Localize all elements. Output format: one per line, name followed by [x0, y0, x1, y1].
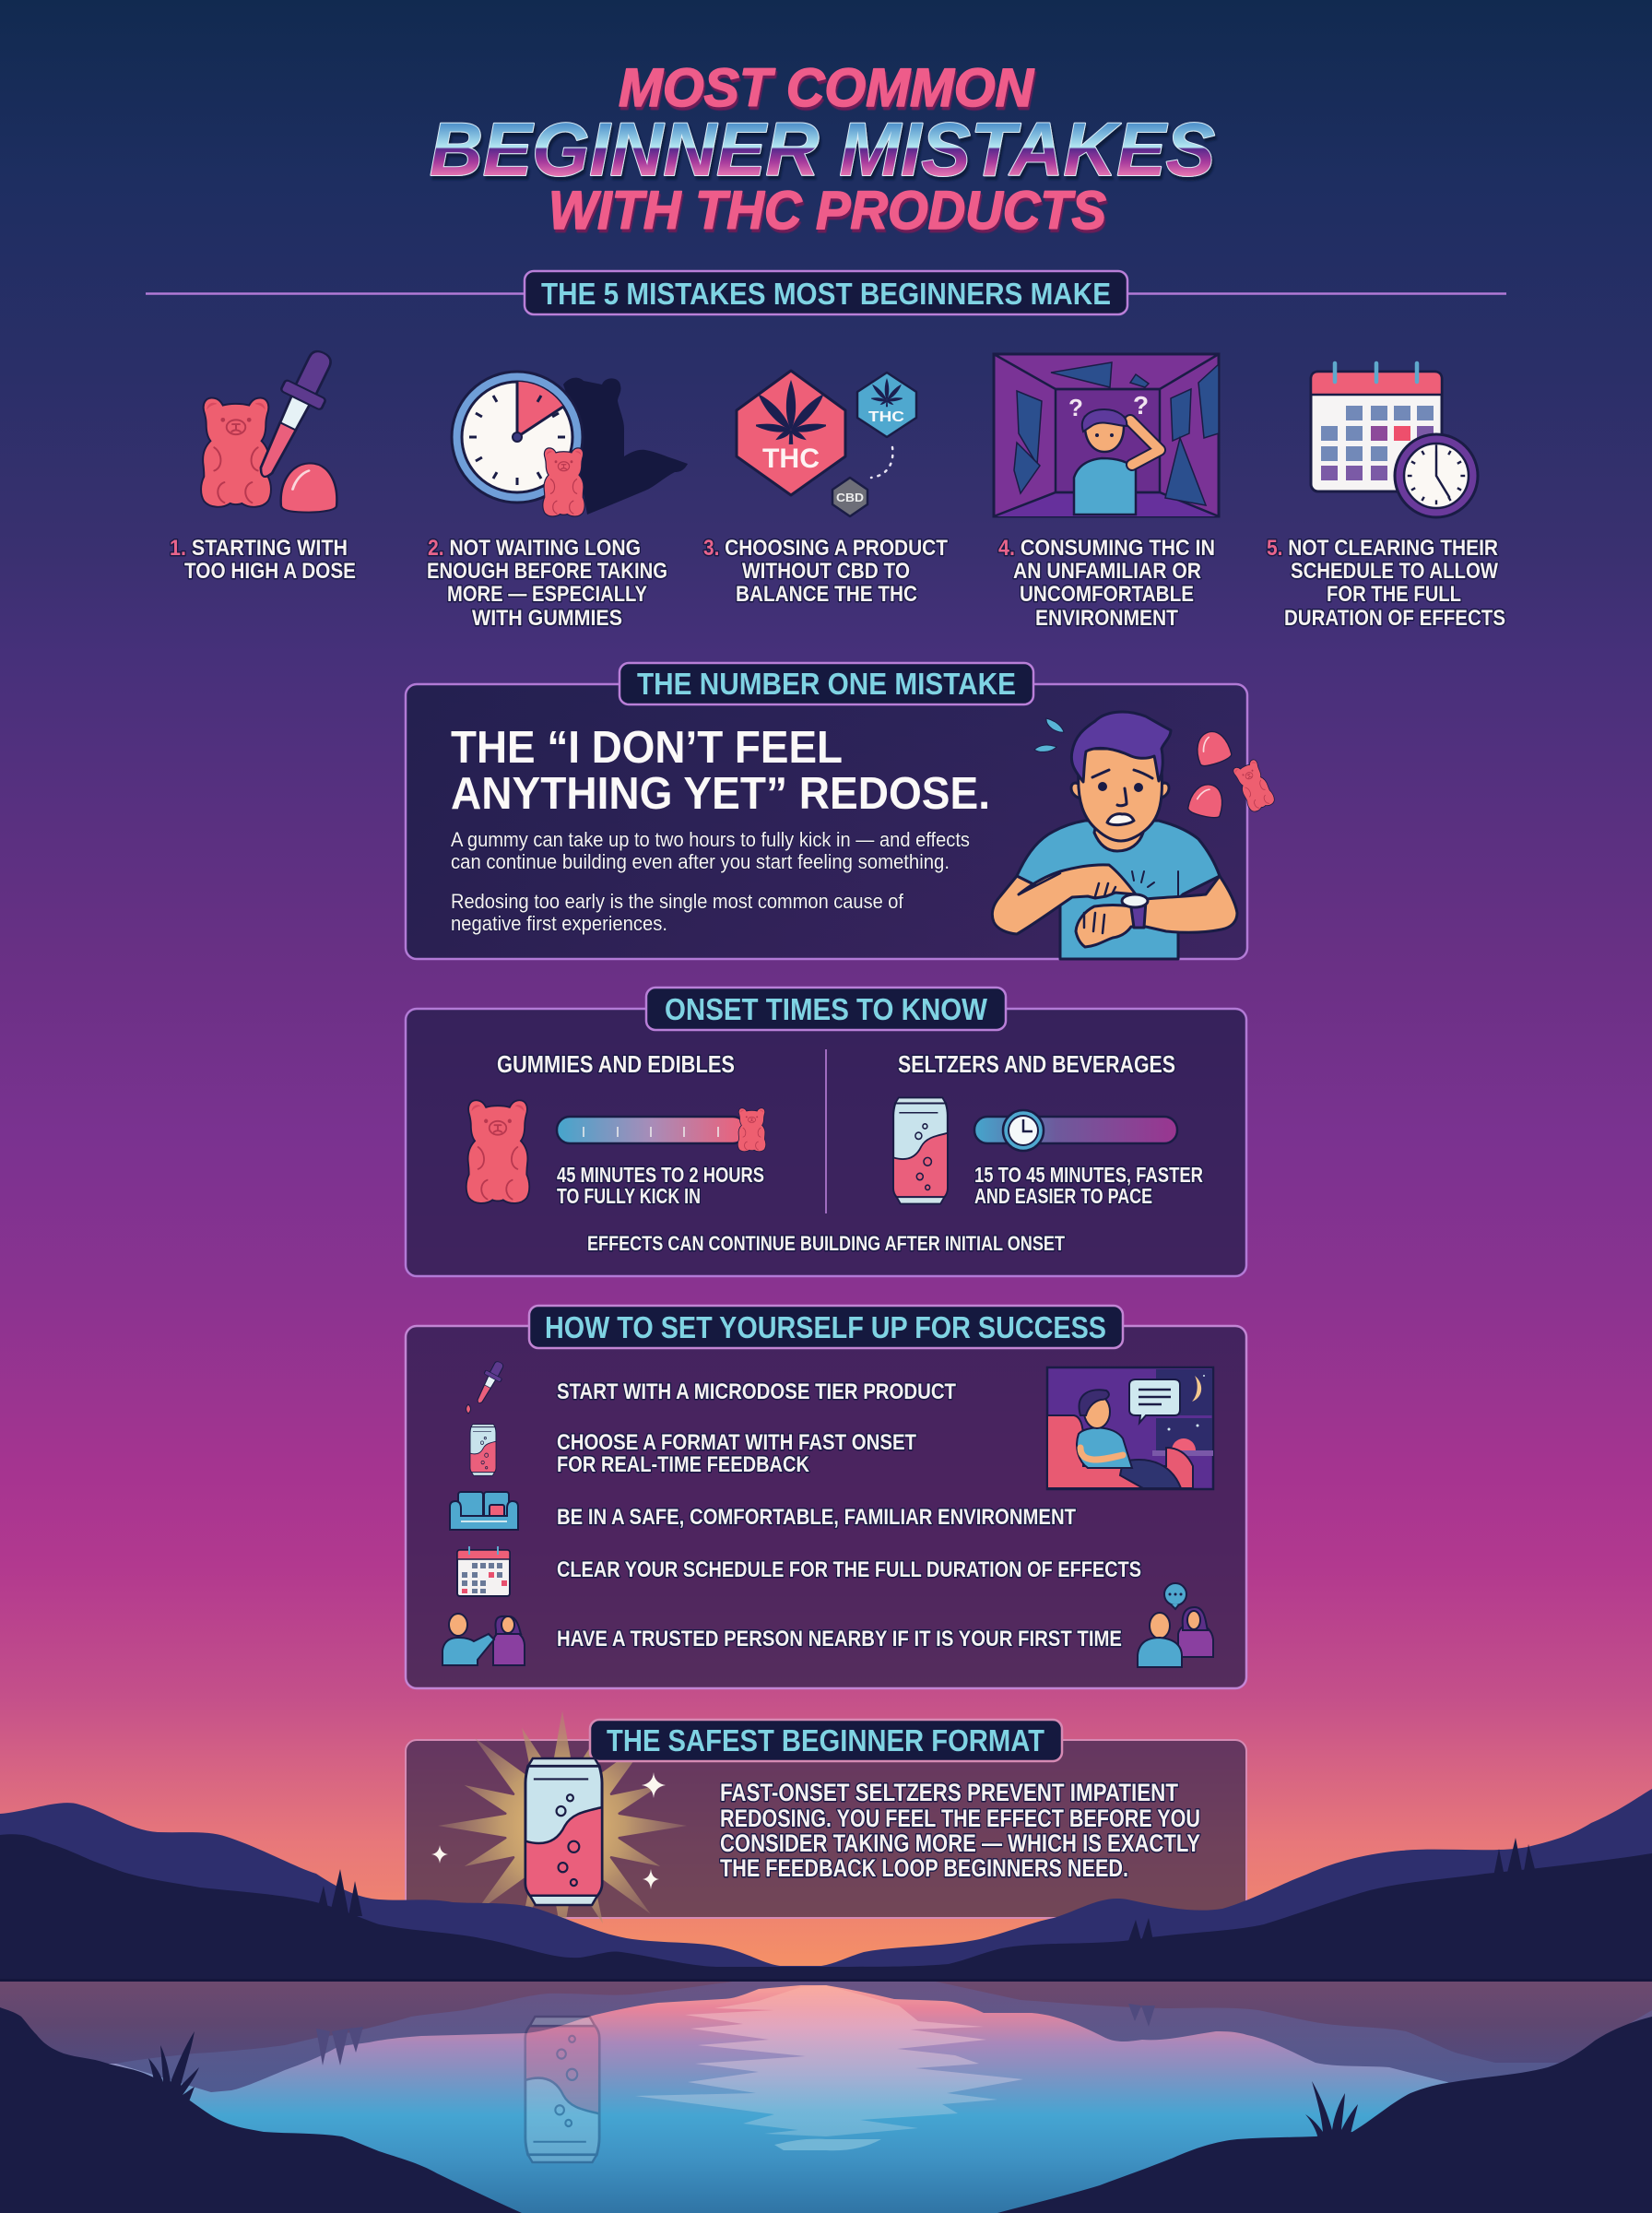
icon: two people — [442, 1614, 525, 1665]
onset bar with clock — [974, 1110, 1177, 1151]
tip: microdose: START WITH A MICRODOSE TIER PRODUCT — [557, 1379, 956, 1404]
icon: distorted room with confused person — [994, 354, 1219, 516]
mistake 2 label — [427, 536, 667, 631]
front mountain range — [0, 1834, 1652, 1981]
person: ? — [1068, 394, 1083, 421]
body text: CONSIDER TAKING MORE — WHICH IS EXACTLY — [720, 1829, 1200, 1857]
large THC hexagon — [737, 371, 845, 495]
body text: negative first experiences. — [451, 912, 667, 935]
mistake 5 label: FOR THE FULL — [1327, 582, 1461, 607]
icons: floating gummies — [1186, 728, 1277, 820]
watch — [1130, 901, 1146, 928]
icon: two people talking — [1138, 1583, 1213, 1667]
panel: the number one mistake — [406, 663, 1277, 959]
mistake 2 label: MORE — ESPECIALLY — [447, 582, 647, 607]
mistake 4 label: UNCOMFORTABLE — [1020, 582, 1194, 607]
mistake 3 label: BALANCE THE THC — [736, 582, 917, 607]
icon: THC and CBD hexagons — [737, 371, 916, 516]
CBD hexagon: CBD — [836, 491, 864, 504]
tip: fast onset: FOR REAL-TIME FEEDBACK — [557, 1452, 810, 1477]
mistake 3 label — [703, 536, 948, 607]
headline: THE “I DON’T FEEL — [451, 723, 843, 773]
panel: how to set yourself up for success — [406, 1306, 1246, 1688]
head — [1071, 783, 1169, 799]
illustration: worried person checking watch — [992, 712, 1237, 959]
near shores — [0, 2007, 1652, 2213]
landscape: mountains — [0, 1789, 1652, 1981]
grass tuft left — [148, 2031, 199, 2104]
grass tuft right — [1305, 2081, 1358, 2139]
illustration: person relaxing on a sofa at night — [1047, 1367, 1213, 1489]
icon: dropper — [466, 1358, 508, 1414]
body text: FAST-ONSET SELTZERS PREVENT IMPATIENT — [720, 1779, 1178, 1806]
title line: beginner mistakes: BEGINNER MISTAKES — [430, 108, 1215, 192]
tip: fast onset: CHOOSE A FORMAT WITH FAST ONSET — [557, 1430, 916, 1455]
left column: gummies and edibles: 45 MINUTES TO 2 HOURS — [557, 1163, 764, 1187]
left column: gummies and edibles: GUMMIES AND EDIBLES — [497, 1050, 735, 1078]
reflected front mountains — [0, 1981, 1652, 2064]
title — [430, 58, 1215, 241]
tip: schedule: CLEAR YOUR SCHEDULE FOR THE FULL DURATION OF EFFECTS — [557, 1557, 1141, 1582]
horizon strip — [0, 1979, 1652, 1982]
sunburst — [438, 1710, 687, 1941]
left column: gummies and edibles: TO FULLY KICK IN — [557, 1184, 701, 1208]
right column: seltzers and beverages: SELTZERS AND BEVERAGES — [898, 1050, 1175, 1078]
mistake 1 label — [170, 536, 356, 584]
body text: THE FEEDBACK LOOP BEGINNERS NEED. — [720, 1854, 1128, 1882]
body text: REDOSING. YOU FEEL THE EFFECT BEFORE YOU — [720, 1805, 1200, 1832]
left column: gummies and edibles — [466, 1050, 766, 1208]
heading tag: HOW TO SET YOURSELF UP FOR SUCCESS — [545, 1310, 1106, 1344]
mistake 4 label: 4. CONSUMING THC IN — [998, 536, 1215, 561]
person — [1068, 391, 1160, 515]
body text — [451, 828, 970, 935]
panel: the safest beginner format — [406, 1710, 1246, 1941]
sparkles — [431, 1772, 666, 1889]
can reflection — [525, 2017, 599, 2162]
mistake 5 label: SCHEDULE TO ALLOW — [1291, 559, 1498, 584]
right column: seltzers and beverages: 15 TO 45 MINUTES, FASTER — [974, 1163, 1203, 1187]
section heading: the 5 mistakes: THE 5 MISTAKES MOST BEGINNERS MAKE — [541, 277, 1111, 311]
heading tag: THE SAFEST BEGINNER FORMAT — [607, 1723, 1044, 1757]
mistake 5 label — [1267, 536, 1505, 631]
icon: sofa — [450, 1492, 518, 1530]
mistake 2 label: ENOUGH BEFORE TAKING — [427, 559, 667, 584]
mistake 5 label: DURATION OF EFFECTS — [1284, 606, 1505, 631]
right arm and fist — [1076, 876, 1237, 947]
onset bar — [557, 1108, 766, 1152]
mistake 2 label: 2. NOT WAITING LONG — [428, 536, 641, 561]
icon: calendar — [457, 1546, 510, 1596]
mistake 2 label: WITH GUMMIES — [472, 606, 622, 631]
mistake 4 label: ENVIRONMENT — [1035, 606, 1178, 631]
mistake 3 label: WITHOUT CBD TO — [742, 559, 910, 584]
mistake 1 label: TOO HIGH A DOSE — [184, 559, 356, 584]
mistake 3 label: 3. CHOOSING A PRODUCT — [703, 536, 948, 561]
reflected grass — [316, 2004, 1155, 2065]
back mountain range — [0, 1789, 1652, 1981]
small THC hexagon: THC — [868, 409, 905, 425]
icon: calendar with clock — [1311, 363, 1478, 517]
icon: can — [470, 1425, 496, 1475]
heading tag: THE NUMBER ONE MISTAKE — [637, 667, 1016, 701]
heading tag: ONSET TIMES TO KNOW — [665, 992, 988, 1026]
icon: clock with bear shadow — [452, 372, 688, 516]
section heading: the 5 mistakes — [146, 271, 1506, 314]
person: ? — [1133, 391, 1149, 420]
tip: environment: BE IN A SAFE, COMFORTABLE, FAMILIAR ENVIRONMENT — [557, 1505, 1076, 1530]
body text: A gummy can take up to two hours to fully kick in — and effects — [451, 828, 970, 851]
title line: with thc products: WITH THC PRODUCTS — [549, 181, 1106, 241]
small THC hexagon — [857, 373, 916, 437]
grass tufts on the far shore — [316, 1838, 1537, 1941]
CBD hexagon — [832, 478, 867, 516]
mistake 4 label: AN UNFAMILIAR OR — [1013, 559, 1201, 584]
sun glint on the water — [635, 1985, 1023, 2136]
reflected back mountains — [0, 1981, 1652, 2112]
body text: Redosing too early is the single most common cause of — [451, 890, 904, 913]
dotted connector — [871, 447, 892, 478]
icon: sweat drops — [1034, 718, 1064, 751]
lake with reflection — [0, 1981, 1652, 2213]
left arm and pointing hand — [992, 865, 1136, 934]
right column: seltzers and beverages — [893, 1050, 1203, 1208]
tip: trusted person: HAVE A TRUSTED PERSON NEARBY IF IT IS YOUR FIRST TIME — [557, 1627, 1122, 1651]
right column: seltzers and beverages: AND EASIER TO PACE — [974, 1184, 1152, 1208]
mistake 1 label: 1. STARTING WITH — [170, 536, 348, 561]
large THC hexagon: THC — [762, 444, 820, 474]
body text — [720, 1779, 1200, 1882]
can — [525, 1758, 602, 1905]
icon: gummy bear and dropper — [201, 343, 344, 513]
footnote: EFFECTS CAN CONTINUE BUILDING AFTER INITIAL ONSET — [587, 1232, 1065, 1255]
body text: can continue building even after you start feeling something. — [451, 850, 950, 873]
tip: fast onset — [557, 1430, 916, 1477]
panel: the number one mistake: ANYTHING YET” REDOSE. — [451, 769, 990, 819]
panel: onset times to know — [406, 988, 1246, 1276]
mistake 5 label: 5. NOT CLEARING THEIR — [1267, 536, 1498, 561]
title line: most common: MOST COMMON — [619, 58, 1034, 118]
mistake 4 label — [998, 536, 1215, 631]
